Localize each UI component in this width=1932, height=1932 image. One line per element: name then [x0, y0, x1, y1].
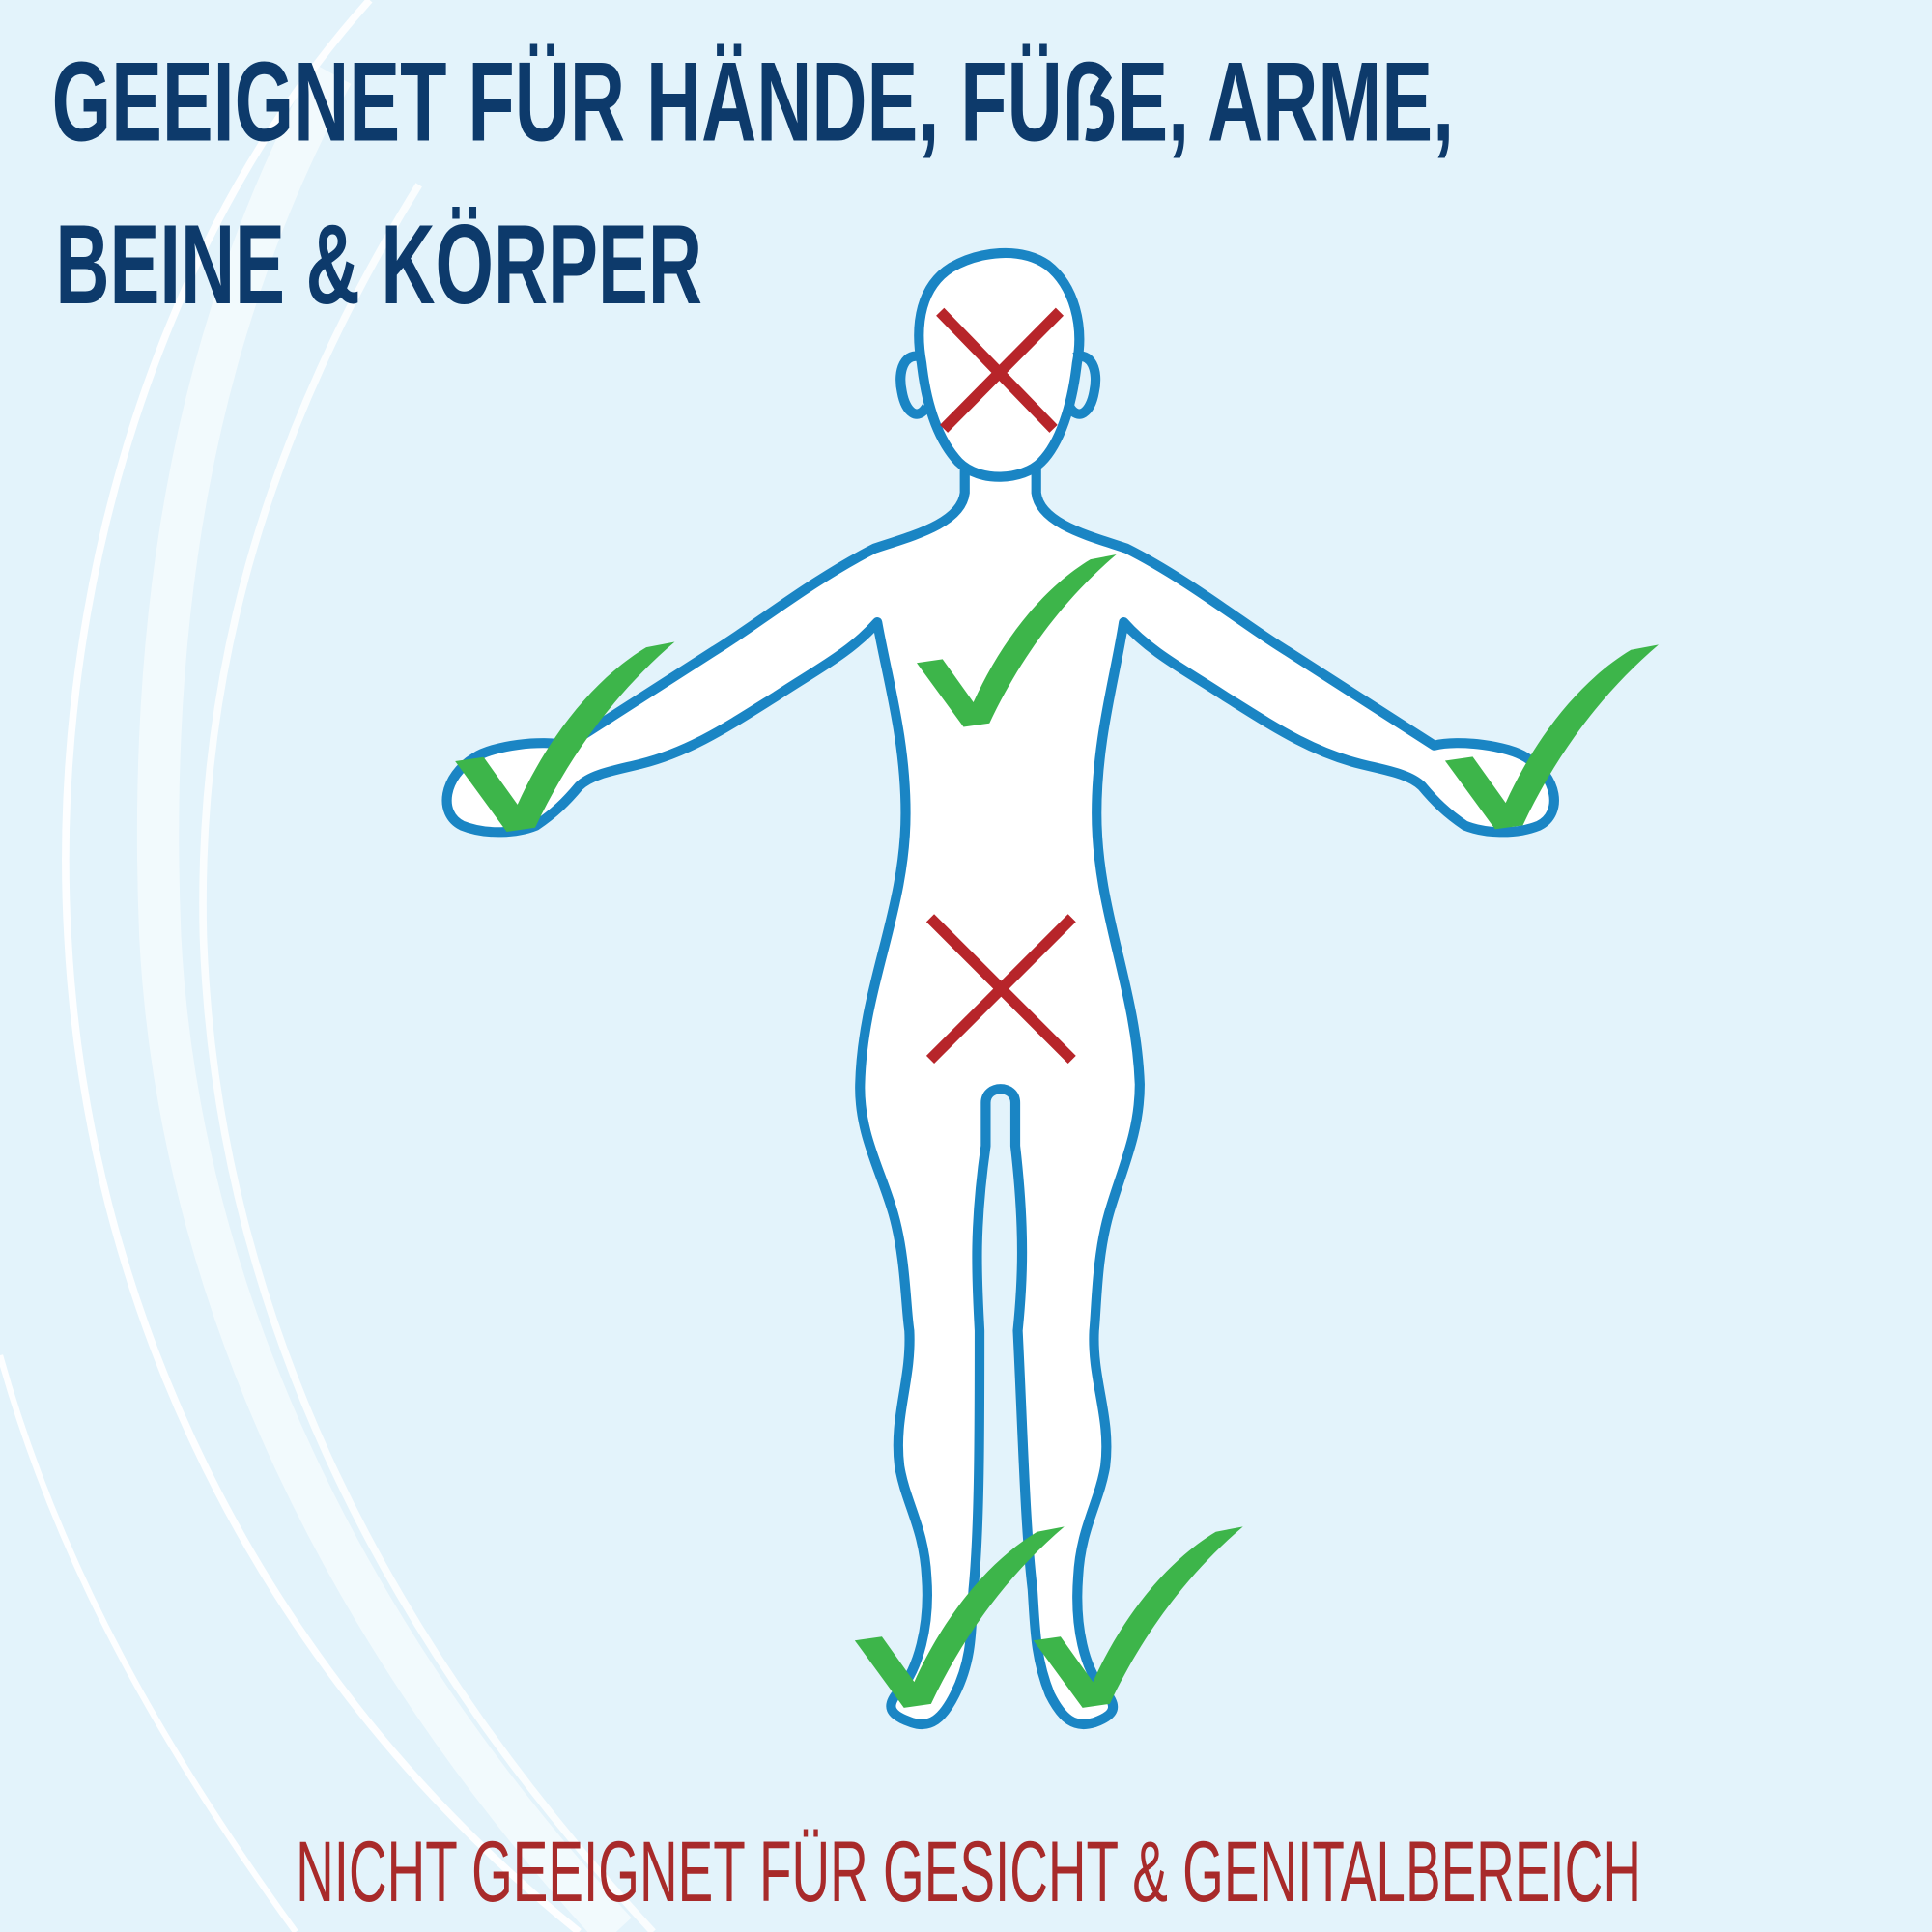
red crosses: not suitable [930, 312, 1072, 1060]
check: torso [917, 554, 1117, 727]
head [919, 253, 1079, 477]
body outline figure [447, 253, 1554, 1724]
cross: genital area [930, 918, 1072, 1060]
ears [900, 356, 926, 414]
check: right foot [1034, 1526, 1243, 1708]
title: BEINE & KÖRPER [55, 201, 702, 327]
decorative background arcs [0, 0, 653, 1932]
green check marks: suitable [455, 554, 1659, 1708]
body silhouette [447, 469, 1554, 1724]
title [52, 38, 1454, 327]
cross: face [940, 312, 1060, 429]
check: right hand [1445, 644, 1659, 829]
check: left foot [855, 1526, 1065, 1708]
check: left hand [455, 642, 674, 832]
